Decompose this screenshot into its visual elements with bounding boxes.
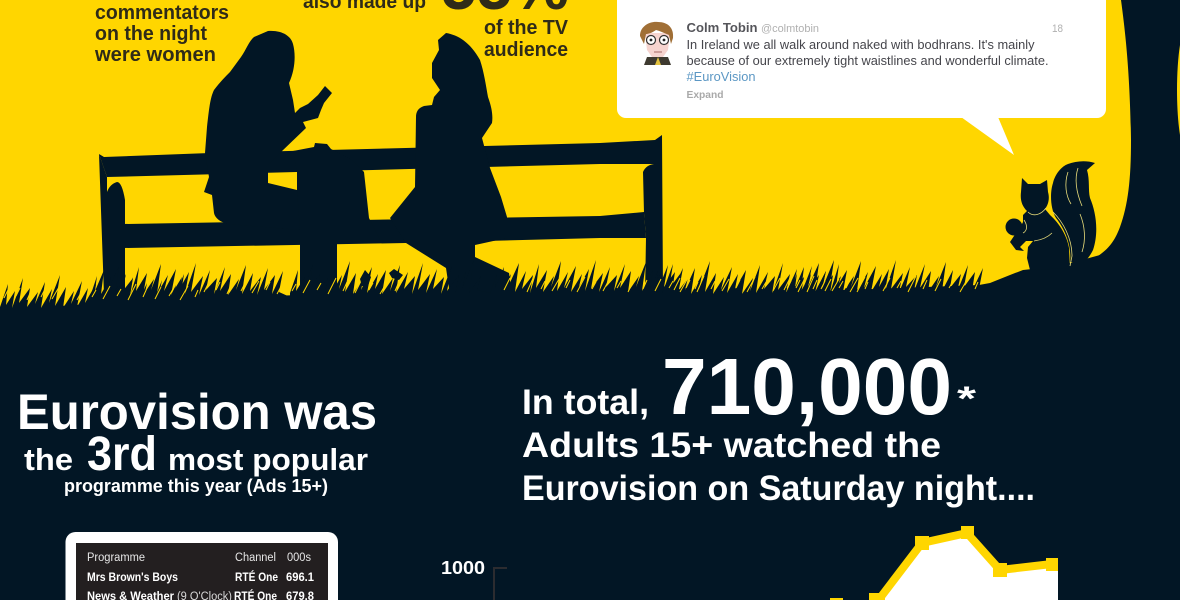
tweet text: 18: [1052, 23, 1063, 35]
left woman reading a phone: [204, 31, 332, 230]
chart axis: [494, 568, 507, 600]
squirrel nut: [1006, 218, 1022, 236]
heading: Eurovision was the 3rd most popular: the: [24, 442, 73, 477]
tweet text: Colm Tobin: [686, 20, 758, 35]
table row: Mrs Brown's Boys: RTÉ One: [235, 571, 278, 584]
table row: Mrs Brown's Boys: 696.1: [286, 572, 315, 584]
heading: In total 710,000 adults watched: *: [957, 380, 977, 418]
tweet text: because of our extremely tight waistlines and wonderful climate.: [686, 54, 1048, 68]
heading: In total 710,000 adults watched: Adults 15+ watched the: [522, 426, 941, 465]
table row: Mrs Brown's Boys: Mrs Brown's Boys: [87, 572, 178, 584]
heading: Eurovision was the 3rd most popular: Eurovision was: [17, 384, 377, 440]
tweet speech bubble: [617, 0, 1106, 155]
bench left post and armrest: [99, 154, 125, 295]
ground and grass: [0, 255, 1100, 343]
text: women share of TV audience: of the TV: [484, 17, 569, 39]
icon: squirrel holding a nut: [1006, 161, 1096, 270]
text: commentators were women: were women: [94, 44, 216, 66]
heading: In total 710,000 adults watched: Eurovision on Saturday night....: [522, 469, 1035, 508]
heading: Eurovision was the 3rd most popular: most popular: [168, 442, 368, 477]
table header row: [87, 552, 311, 564]
tweet text: Expand: [686, 89, 724, 101]
bench back rail: [99, 135, 662, 177]
table header row: 000s: [287, 552, 311, 564]
chart area fill: [882, 535, 1058, 600]
tweet text: [686, 20, 1063, 101]
handbag on bench: [293, 143, 380, 240]
heading: Eurovision was the 3rd most popular: programme this year (Ads 15+): [64, 476, 328, 496]
line chart: Eurovision audience: [441, 526, 1058, 600]
heading: In total 710,000 adults watched: In total,: [522, 383, 649, 422]
text: commentators were women: commentators: [95, 2, 229, 24]
bench centre leg: [300, 240, 337, 295]
text: women share of TV audience: [303, 0, 569, 61]
tweet text: #EuroVision: [686, 70, 756, 84]
squirrel body and head: [1010, 178, 1070, 270]
bench seat rail: [124, 212, 646, 248]
background: yellow sky panel: [0, 0, 1180, 312]
table row: Mrs Brown's Boys: [87, 571, 315, 584]
chart axis label: 1000: [441, 558, 485, 578]
table header row: Programme: [87, 552, 145, 564]
heading: In total 710,000 adults watched: [522, 342, 1035, 508]
background: navy lower panel: [0, 312, 1180, 600]
bench right post and armrest: [643, 135, 663, 295]
text: commentators were women: on the night: [95, 23, 207, 45]
icon: tweet author avatar: [640, 22, 673, 65]
text: commentators were women: [94, 2, 229, 66]
chart line and markers: [830, 526, 1058, 600]
squirrel tail: [1051, 161, 1096, 264]
tweet text: In Ireland we all walk around naked with bodhrans. It's mainly: [686, 38, 1035, 52]
heading: Eurovision was the 3rd most popular: [17, 384, 377, 496]
heading: In total 710,000 adults watched: 710,000: [662, 342, 952, 431]
tweet text: @colmtobin: [761, 23, 819, 35]
illustration: bench with two women silhouettes: [99, 31, 663, 295]
table row: News and Weather: [87, 590, 315, 600]
panel: top programmes table: [66, 532, 338, 600]
right woman in profile: [390, 33, 512, 295]
heading: Eurovision was the 3rd most popular: 3rd: [87, 428, 157, 481]
text: women share of TV audience: audience: [484, 39, 568, 61]
tree trunk: [1060, 0, 1180, 320]
table header row: Channel: [235, 552, 276, 564]
